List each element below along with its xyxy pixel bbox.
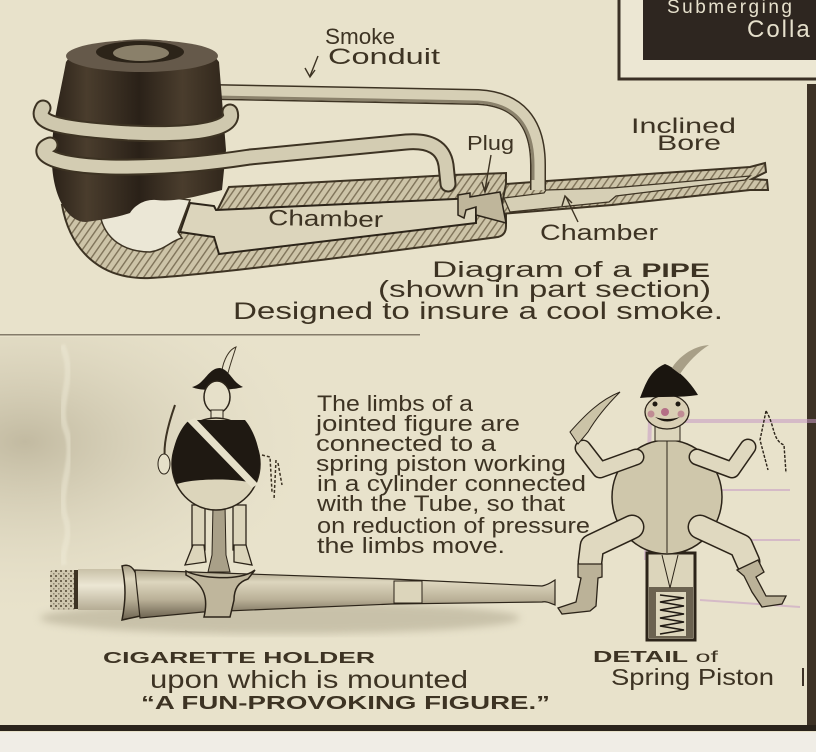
explanatory text block: spring piston working [316, 451, 566, 476]
cigarette holder [50, 565, 555, 620]
label: bowl chamber: Chamber [268, 205, 383, 232]
clamp [186, 570, 255, 617]
explanatory text block: on reduction of pressure [317, 513, 590, 538]
label: Inclined Bore [631, 115, 736, 155]
right edge rule [807, 84, 816, 730]
pipe caption [233, 257, 723, 325]
chamber arrow [562, 196, 578, 222]
lower conduit and ring [44, 142, 448, 184]
bowl rim [66, 40, 218, 72]
explanatory text block: The limbs of a [317, 391, 474, 416]
page edge tick [802, 668, 804, 686]
right arm [697, 447, 748, 470]
sword [165, 405, 175, 458]
top-right black caption box [619, 0, 816, 79]
label: stem chamber: Chamber [540, 220, 658, 245]
face [652, 402, 680, 422]
body [612, 440, 722, 554]
explanatory text block: the limbs move. [317, 533, 505, 558]
pipe hatched body section [62, 173, 506, 278]
explanatory text block: connected to a [316, 431, 497, 456]
tobacco end [50, 570, 76, 610]
caption: cigarette holder: “A FUN-PROVOKING FIGURE.” [141, 693, 550, 713]
label: Smoke Conduit: Conduit [328, 44, 440, 69]
chain [760, 411, 786, 473]
bowl opening [96, 41, 184, 63]
white air space [100, 195, 190, 252]
jacket [172, 420, 260, 484]
holder shadow [40, 602, 520, 634]
caption: cigarette holder: CIGARETTE HOLDER [103, 650, 376, 667]
bowl [52, 40, 226, 222]
sash [187, 418, 258, 488]
pipe diagram [41, 40, 768, 278]
pipe caption: Diagram of a PIPE [432, 257, 710, 282]
sword and hand [570, 392, 620, 444]
upper ring [41, 108, 231, 134]
caption: cigarette holder [103, 650, 550, 713]
main chamber [180, 198, 476, 254]
legs [185, 505, 252, 565]
pink stamp [646, 420, 816, 607]
upper conduit [215, 92, 538, 190]
holder flare [122, 565, 145, 620]
plug arrow [482, 155, 491, 192]
caption: cigarette holder: upon which is mounted [150, 666, 468, 694]
bottom rule [0, 725, 816, 731]
caption: detail of spring piston: DETAIL of [593, 649, 719, 666]
support post [208, 505, 230, 572]
body [172, 418, 260, 510]
caption: detail of spring piston [593, 649, 774, 690]
spring [660, 595, 684, 634]
right boot [737, 560, 786, 607]
plug [458, 192, 506, 223]
explanatory text block [315, 391, 590, 558]
top-right black caption box: Colla [747, 16, 812, 43]
right leg [700, 527, 748, 562]
left arm [583, 448, 636, 470]
neck [655, 426, 680, 441]
small soldier figure [158, 347, 282, 572]
smoke wisp [62, 345, 70, 565]
pipe caption: Designed to insure a cool smoke. [233, 298, 723, 325]
label: Smoke Conduit: Smoke [325, 24, 395, 49]
band [394, 581, 422, 603]
explanatory text block: in a cylinder connected [317, 471, 586, 496]
label: Inclined Bore: Inclined [631, 115, 736, 138]
label: Plug: Plug [467, 133, 514, 155]
head [204, 381, 230, 413]
pipe caption: (shown in part section) [378, 276, 711, 302]
hat [640, 364, 698, 398]
feather [672, 345, 709, 374]
stem chamber [504, 176, 750, 212]
cigarette paper [78, 569, 132, 610]
stem section [500, 163, 768, 214]
left boot [558, 564, 602, 614]
caption: detail of spring piston: Spring Piston [611, 664, 774, 690]
explanatory text block: jointed figure are [315, 411, 520, 436]
holder tube [135, 570, 555, 618]
cheeks and nose [648, 408, 684, 418]
hand [158, 454, 170, 474]
hat [192, 368, 243, 390]
panel divider [0, 334, 420, 336]
explanatory text block: with the Tube, so that [316, 491, 565, 516]
head [645, 395, 689, 429]
label: Smoke Conduit [325, 24, 440, 69]
label: Inclined Bore: Bore [657, 132, 721, 155]
lower panel shading [0, 337, 500, 637]
smoke conduit arrow [305, 56, 318, 77]
bottom margin [0, 732, 816, 752]
left leg [590, 527, 632, 562]
piston cylinder [647, 553, 695, 640]
feather [222, 347, 236, 382]
neck [211, 410, 223, 420]
detail figure with spring piston [558, 345, 786, 640]
sleeve and chain [262, 455, 282, 500]
